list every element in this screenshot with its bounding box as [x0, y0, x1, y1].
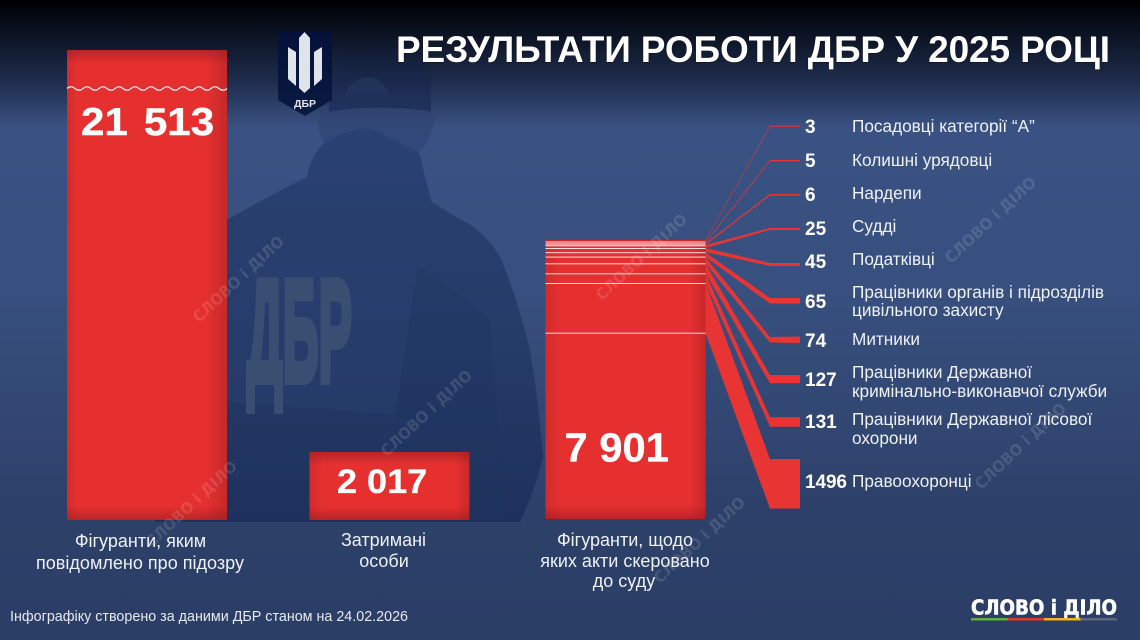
row: MPs: Нардепи — [852, 183, 922, 203]
row: civil protection: 65 — [805, 292, 827, 313]
bar: suspects 21 513 — [67, 50, 227, 520]
row: officials: 3 — [805, 117, 816, 138]
bar caption: detained: Затримані — [341, 530, 426, 550]
row: forest guard: охорони — [852, 428, 918, 448]
bar caption: indicted: Фігуранти, щодо — [557, 530, 693, 550]
row: law enforcement — [805, 471, 972, 493]
watermarks: СЛОВО і ДІЛО — [592, 211, 691, 304]
row: penitentiary: 127 — [805, 370, 837, 391]
source note: Інфографіку створено за даними ДБР станом на 24.02.2026 — [10, 609, 408, 625]
bar: detained 2 017 — [310, 452, 470, 520]
watermarks: СЛОВО і ДІЛО — [941, 174, 1040, 267]
row: judges: 25 — [805, 219, 827, 240]
value: 7 901 — [564, 425, 669, 470]
row: forest guard — [805, 409, 1092, 448]
watermarks: СЛОВО і ДІЛО — [142, 458, 241, 551]
bar caption: suspects: повідомлено про підозру — [36, 553, 244, 573]
value: 21 513 — [81, 99, 214, 144]
row: civil protection: цивільного захисту — [852, 300, 1004, 320]
watermarks: СЛОВО і ДІЛО — [377, 367, 476, 460]
scale break wave — [67, 87, 227, 90]
watermarks — [142, 174, 1070, 587]
row: judges: Судді — [852, 216, 896, 236]
bar caption: indicted — [540, 530, 710, 591]
bar caption: detained — [341, 530, 426, 571]
row: penitentiary: Працівники Державної — [852, 362, 1032, 382]
row: former officials: Колишні урядовці — [852, 150, 992, 170]
title: РЕЗУЛЬТАТИ РОБОТИ ДБР У 2025 РОЦІ — [396, 29, 1110, 70]
row: MPs — [805, 183, 922, 206]
bar caption: suspects: Фігуранти, яким — [75, 531, 206, 551]
row: law enforcement: 1496 — [805, 472, 847, 493]
row: tax officers: 45 — [805, 252, 827, 273]
publisher logo: СЛОВО і ДІЛО — [971, 596, 1117, 620]
row: tax officers — [805, 249, 935, 273]
row: civil protection — [805, 282, 1104, 320]
bar caption: detained: особи — [359, 551, 409, 571]
bar: indicted 7 901 — [546, 240, 706, 519]
row: customs: 74 — [805, 331, 827, 352]
row: law enforcement: Правоохоронці — [852, 471, 972, 491]
row: customs — [805, 329, 920, 352]
agency shield logo: ДБР — [294, 98, 316, 110]
segment dividers — [546, 241, 706, 334]
row: penitentiary — [805, 362, 1107, 401]
value: 2 017 — [337, 463, 427, 501]
bar caption: suspects — [36, 531, 244, 573]
row: former officials: 5 — [805, 151, 816, 172]
row: civil protection: Працівники органів і підрозділів — [852, 282, 1104, 302]
row: MPs: 6 — [805, 185, 816, 206]
watermarks: СЛОВО і ДІЛО — [650, 494, 749, 587]
row: forest guard: 131 — [805, 412, 837, 433]
row: forest guard: Працівники Державної лісової — [852, 409, 1092, 429]
row: penitentiary: кримінально-виконавчої служби — [852, 381, 1107, 401]
watermarks: СЛОВО і ДІЛО — [189, 233, 288, 326]
row: customs: Митники — [852, 329, 920, 349]
watermarks: СЛОВО і ДІЛО — [971, 400, 1070, 493]
row: judges — [805, 216, 896, 240]
row: tax officers: Податківці — [852, 249, 935, 269]
row: officials: Посадовці категорії “А” — [852, 116, 1035, 136]
back print: ДБР: ДБР — [247, 250, 352, 412]
category list — [805, 116, 1107, 493]
row: former officials — [805, 150, 992, 172]
bar caption: indicted: яких акти скеровано — [540, 551, 710, 571]
fan connectors from bar to categories — [706, 126, 800, 508]
bar caption: indicted: до суду — [593, 571, 655, 591]
agency shield logo — [278, 31, 332, 116]
background photo: officer seen from behind — [155, 43, 543, 522]
